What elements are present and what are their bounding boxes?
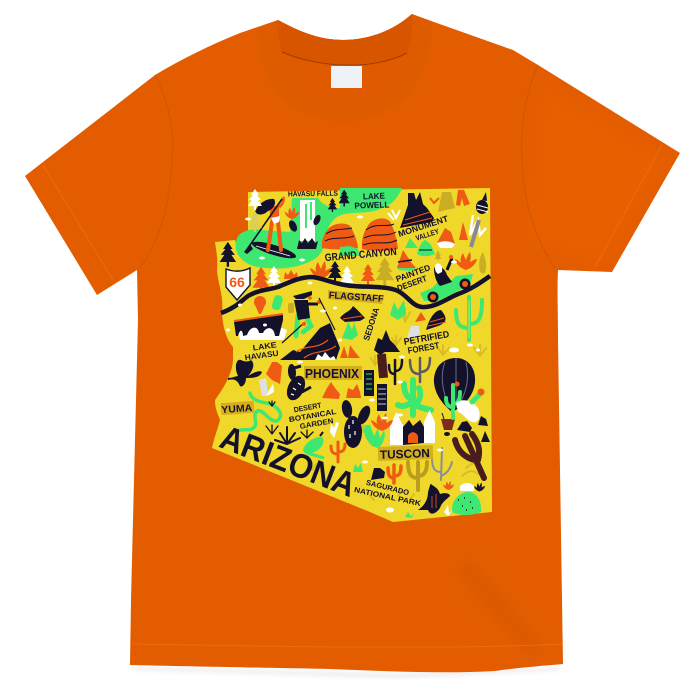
saguaro national park label bbox=[353, 478, 422, 508]
small desert cacti near the balloon bbox=[389, 358, 430, 384]
white figure bbox=[456, 400, 480, 422]
pale background plants bbox=[308, 308, 486, 500]
desert botanical garden label: GARDEN bbox=[299, 416, 334, 431]
white and dark accent specks bbox=[226, 216, 480, 464]
lake powell label: POWELL bbox=[354, 199, 390, 211]
north-east landmarks bbox=[388, 190, 488, 274]
map background bbox=[212, 188, 492, 522]
big cactus bbox=[344, 416, 362, 448]
green prickly cactus bbox=[398, 380, 431, 415]
yuma label: YUMA bbox=[221, 403, 253, 416]
envelope bbox=[434, 358, 475, 412]
waterfall bbox=[297, 200, 318, 249]
small cacti below botanical garden bbox=[330, 422, 363, 472]
jeep with driver bbox=[420, 255, 473, 302]
monument valley: VALLEY bbox=[414, 227, 440, 243]
backpack bbox=[288, 303, 294, 313]
inner neck bbox=[278, 14, 413, 102]
paddleboarder bbox=[244, 197, 297, 262]
legs bbox=[268, 222, 281, 250]
petrified forest label bbox=[403, 329, 450, 356]
back neck band bbox=[278, 14, 413, 65]
phoenix label: PHOENIX bbox=[305, 367, 360, 381]
basket bbox=[441, 419, 455, 430]
lake powell label bbox=[354, 191, 390, 211]
red rocks bbox=[322, 382, 340, 399]
balloon and lantern bbox=[254, 294, 284, 314]
hiker on mountain bbox=[280, 291, 340, 360]
sleeve and hem seams bbox=[43, 65, 662, 647]
paddle bbox=[248, 199, 282, 248]
collar band bbox=[257, 14, 433, 122]
sedona label: SEDONA bbox=[361, 306, 381, 342]
lake havasu label bbox=[244, 340, 279, 362]
cacti around phoenix and yuma bbox=[228, 360, 373, 448]
driver bbox=[434, 267, 452, 286]
trees and plants, north-west bbox=[220, 189, 394, 293]
route 66 road bbox=[221, 276, 490, 313]
saguaro national park label: NATIONAL PARK bbox=[353, 485, 422, 508]
south-central plants bbox=[364, 413, 485, 492]
petrified forest label: FOREST bbox=[407, 340, 441, 356]
head and hat bbox=[293, 291, 312, 299]
cacti at the south-east corner bbox=[386, 483, 481, 518]
mission san xavier bbox=[390, 410, 435, 445]
butte bbox=[400, 192, 434, 228]
havasu falls label: HAVASU FALLS bbox=[288, 189, 338, 198]
neck label bbox=[331, 66, 362, 88]
desert botanical garden label: BOTANICAL bbox=[288, 407, 337, 424]
pillars bbox=[364, 354, 388, 411]
painted desert label bbox=[394, 262, 432, 293]
flagstaff label: FLAGSTAFF bbox=[328, 290, 384, 305]
arm and poles bbox=[308, 302, 318, 306]
monument valley bbox=[397, 192, 450, 243]
hair bbox=[255, 199, 275, 215]
hot air balloon bbox=[434, 358, 484, 430]
body fold shading bbox=[455, 90, 665, 655]
grand canyon label: GRAND CANYON bbox=[324, 246, 397, 264]
petrified forest label: PETRIFIED bbox=[403, 329, 450, 348]
desert plants above the title bbox=[266, 401, 313, 444]
desert botanical garden label bbox=[288, 401, 337, 431]
green snake bbox=[234, 393, 281, 432]
wheels bbox=[428, 292, 438, 302]
painted desert label: PAINTED bbox=[394, 262, 432, 284]
lake havasu label: HAVASU bbox=[244, 349, 279, 362]
painted desert label: DESERT bbox=[396, 273, 429, 293]
tuscon label: TUSCON bbox=[380, 446, 430, 462]
green saguaro bbox=[456, 297, 482, 340]
petrified forest area bbox=[390, 297, 482, 340]
mountain bbox=[280, 323, 340, 360]
legs bbox=[296, 314, 311, 336]
arm bbox=[279, 197, 283, 207]
sedona landmarks bbox=[340, 306, 400, 358]
arizona title: ARIZONA bbox=[215, 419, 361, 505]
flowers bbox=[472, 392, 482, 402]
route 66 shield bbox=[226, 268, 250, 300]
black cactus bbox=[283, 373, 309, 403]
grand canyon rocks bbox=[322, 218, 398, 256]
body bbox=[294, 300, 310, 320]
label: MONUMENT bbox=[397, 213, 450, 239]
south-east rocks and brown saguaro bbox=[444, 416, 490, 478]
green barrel cactus bbox=[303, 432, 324, 458]
route 66 shield: 66 bbox=[229, 274, 245, 290]
green lake region bbox=[236, 188, 402, 269]
map of Arizona bbox=[212, 188, 492, 522]
bridge over the colorado bbox=[234, 314, 287, 340]
desert botanical garden label: DESERT bbox=[293, 401, 323, 414]
saguaro national park label: SAGURADO bbox=[365, 478, 410, 497]
lake havasu label: LAKE bbox=[252, 340, 278, 353]
lake powell label: LAKE bbox=[363, 191, 385, 201]
board bbox=[251, 238, 297, 262]
ground shadow bbox=[135, 667, 560, 678]
green cactus passenger bbox=[446, 385, 460, 418]
torso bbox=[269, 206, 279, 222]
